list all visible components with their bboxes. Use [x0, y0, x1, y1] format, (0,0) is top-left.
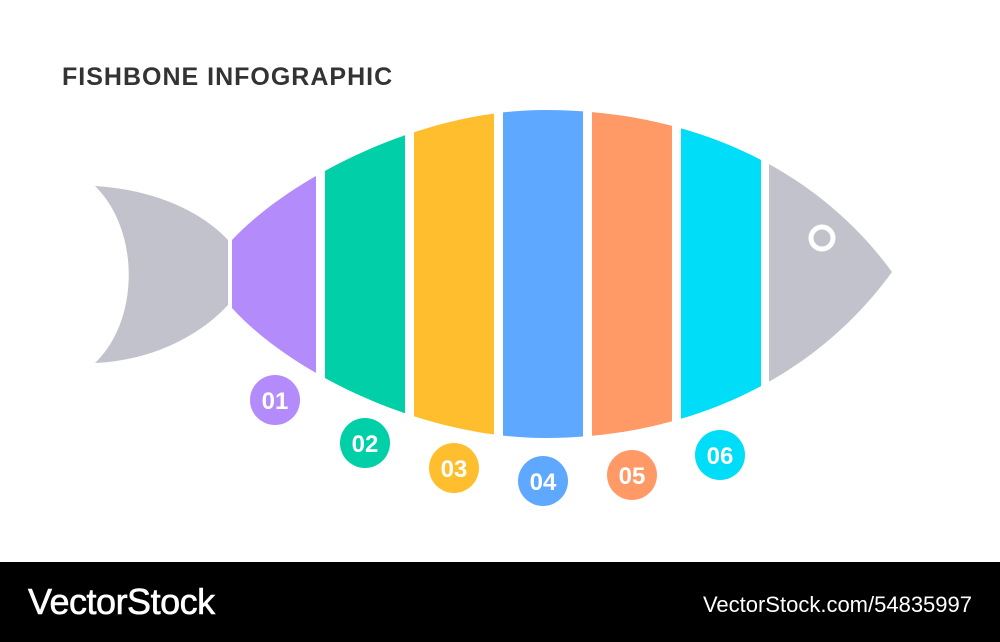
badge 05: [607, 450, 657, 500]
badge 06: 06: [707, 443, 733, 470]
badge 02: [340, 418, 390, 468]
badge 06: [695, 430, 745, 480]
segment 06: [681, 128, 761, 419]
badge 01: 01: [262, 388, 288, 415]
icon: eye: [811, 227, 833, 249]
segment 03: [414, 100, 494, 450]
badge 01: [250, 375, 300, 425]
title: FISHBONE INFOGRAPHIC: [62, 63, 393, 91]
badge 04: 04: [530, 469, 557, 496]
badge 05: 05: [619, 463, 645, 490]
segment 01: [232, 176, 316, 373]
segment 02: [325, 135, 405, 414]
badge 03: 03: [441, 456, 467, 483]
fish body: [232, 100, 899, 450]
fish head: [769, 164, 892, 382]
badge 03: [429, 443, 479, 493]
icon: fish tail: [95, 186, 228, 363]
segment 04: [503, 100, 583, 450]
segment 05: [592, 100, 672, 450]
badge 04: [518, 456, 568, 506]
footer bar: [0, 562, 1000, 642]
footer bar: VectorStock.com/54835997: [703, 592, 972, 617]
badge 02: 02: [352, 431, 378, 458]
footer bar: VectorStock: [28, 581, 216, 622]
